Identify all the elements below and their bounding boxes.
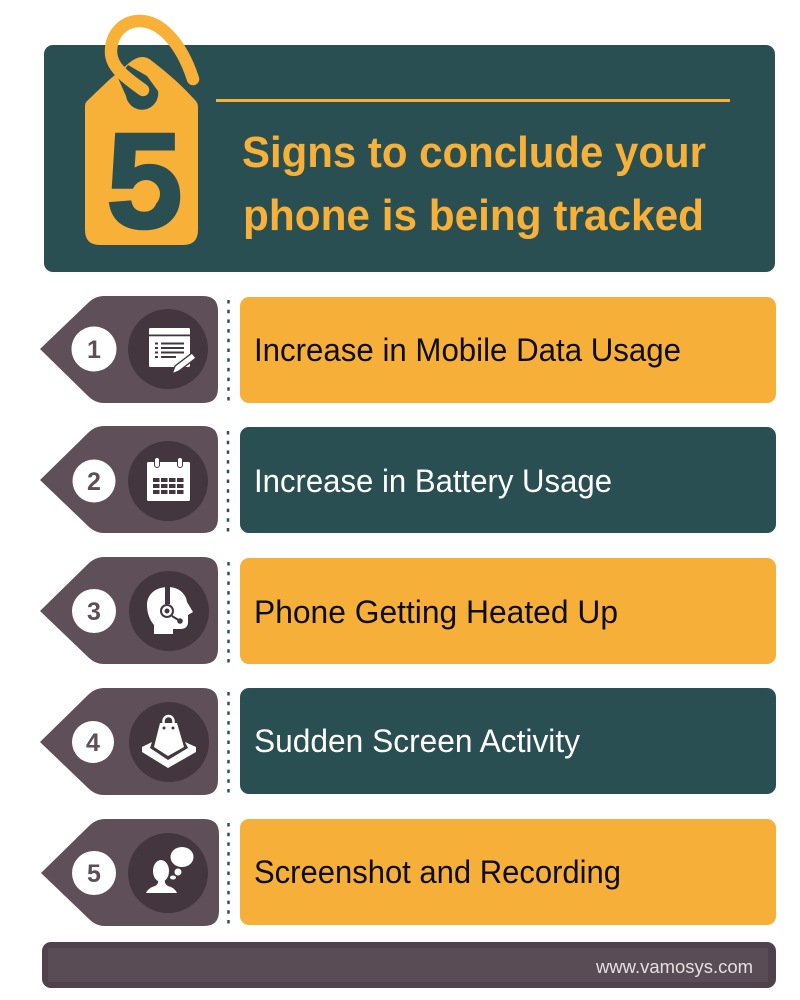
icon: document with pencil	[149, 328, 196, 374]
title: phone is being tracked	[243, 191, 704, 240]
row 3 panel: Phone Getting Heated Up	[254, 594, 618, 630]
row 2 panel: Increase in Battery Usage	[254, 463, 612, 499]
row 3 panel	[240, 558, 776, 664]
row 4 panel: Sudden Screen Activity	[254, 723, 580, 759]
row 4 panel	[240, 688, 776, 794]
icon: head with headset	[147, 587, 193, 634]
row 4	[40, 688, 776, 795]
row 5	[41, 819, 776, 926]
website url: www.vamosys.com	[595, 957, 753, 977]
row 4 divider	[227, 692, 230, 794]
row 5 panel: Screenshot and Recording	[254, 854, 621, 890]
title: Signs to conclude your	[242, 128, 706, 177]
row 1 tag	[40, 296, 218, 403]
icon: price tag with number 5	[85, 21, 198, 256]
row 3 tag: 3	[87, 598, 101, 626]
title	[242, 128, 706, 240]
row 2 tag	[40, 426, 218, 533]
row 2	[40, 426, 776, 533]
row 3	[40, 557, 776, 664]
row 1 panel	[240, 297, 776, 403]
row 5 divider	[227, 823, 230, 925]
row 4 tag: 4	[86, 729, 100, 757]
icon: person with thought bubble	[146, 847, 194, 893]
row 5 tag: 5	[87, 860, 101, 888]
row 5 tag	[41, 819, 219, 926]
row 4 tag	[40, 688, 218, 795]
icon: price tag with number 5: 5	[107, 107, 182, 256]
row 2 tag: 2	[87, 468, 101, 496]
row 5 panel	[240, 819, 776, 925]
row 3 tag	[40, 557, 218, 664]
header rule	[216, 99, 730, 102]
row 1 panel: Increase in Mobile Data Usage	[254, 332, 681, 368]
row 3 divider	[227, 562, 230, 664]
icon: calendar	[147, 458, 190, 501]
row 1 tag: 1	[87, 336, 101, 364]
header panel	[44, 45, 775, 272]
row 1	[40, 296, 776, 403]
footer bar	[42, 942, 776, 988]
icon: shopping bag on tray	[142, 716, 196, 768]
row 2 divider	[227, 431, 229, 533]
row 1 divider	[227, 300, 230, 402]
row 2 panel	[240, 427, 776, 533]
